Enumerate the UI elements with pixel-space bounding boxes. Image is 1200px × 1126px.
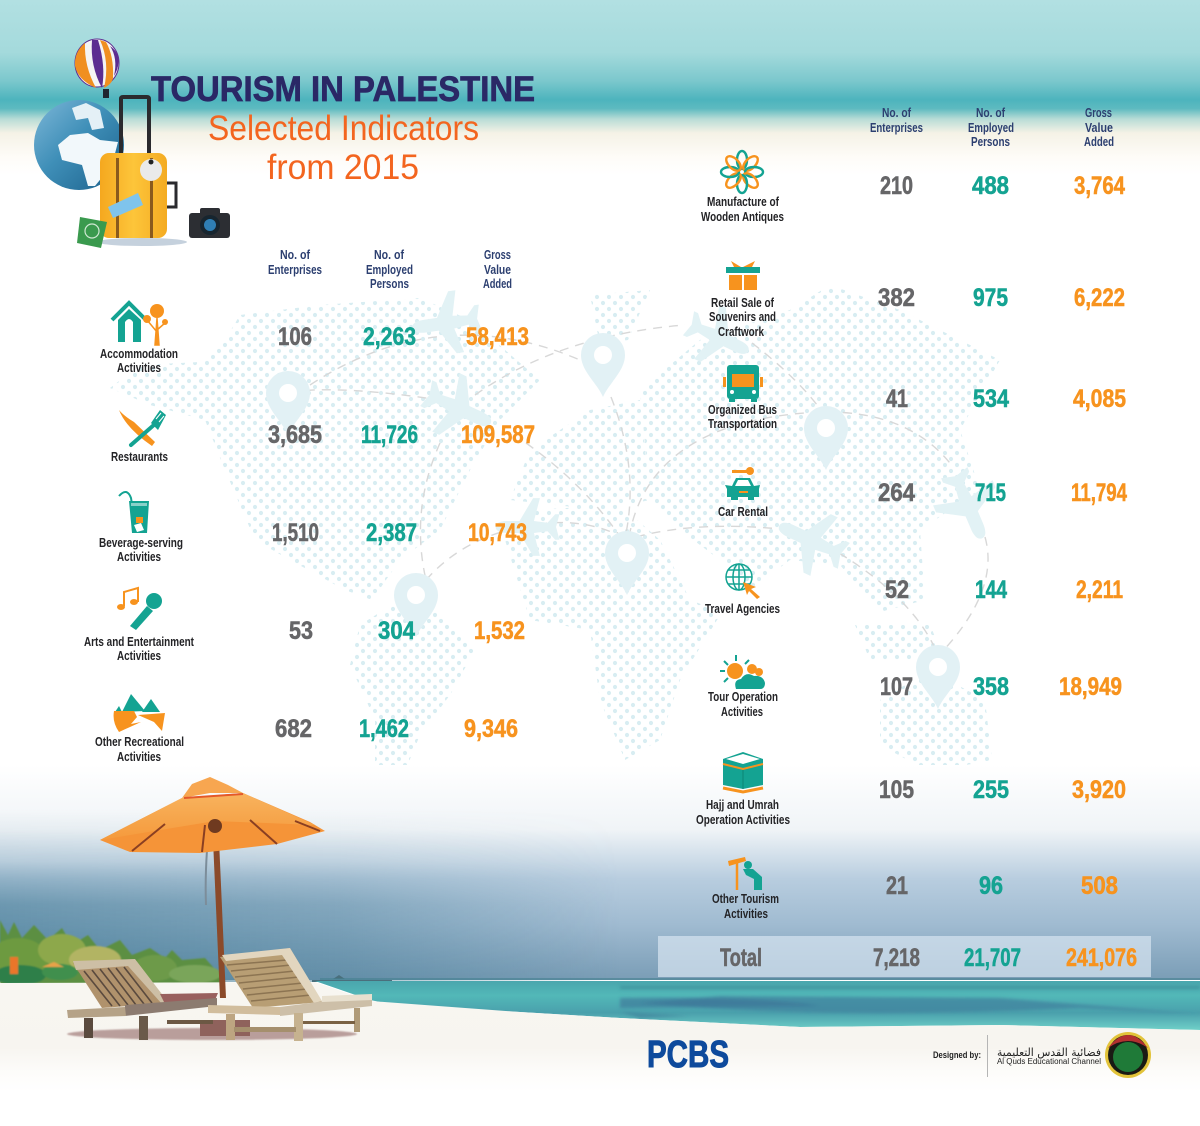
label	[99, 536, 183, 564]
values: 21	[886, 872, 908, 900]
label	[701, 195, 784, 224]
total row: Total	[720, 944, 762, 972]
title: TOURISM IN PALESTINE	[151, 70, 535, 109]
umbrella	[100, 777, 325, 1036]
pier	[312, 975, 392, 982]
values: 9,346	[464, 715, 518, 743]
sand	[0, 982, 1200, 1092]
column headers: Gross	[1085, 106, 1112, 120]
values: 488	[972, 172, 1009, 200]
row: souvenirs	[709, 261, 1125, 339]
row: bus	[708, 365, 1126, 431]
credit: designed by	[933, 1035, 1101, 1077]
label: Transportation	[708, 417, 777, 431]
icon: person at telescope	[728, 857, 762, 890]
values	[268, 421, 535, 449]
label	[709, 296, 776, 339]
icon: bus	[723, 365, 763, 402]
label: Organized Bus	[708, 403, 777, 417]
icon: mountains and river	[114, 694, 165, 732]
icon: geometric flower	[721, 151, 763, 193]
label: Operation Activities	[696, 813, 790, 827]
values: 6,222	[1074, 284, 1125, 312]
sea	[315, 978, 1200, 1030]
left sun lounger	[67, 959, 218, 1040]
icon: hot air balloon	[75, 39, 119, 98]
icon: car and key	[725, 467, 760, 500]
values: 682	[275, 715, 312, 743]
column headers: Persons	[971, 135, 1010, 149]
right sun lounger	[208, 948, 372, 1041]
illustration: travel cluster	[34, 39, 230, 248]
column headers: No. of	[280, 248, 311, 262]
values: 975	[973, 284, 1008, 312]
values	[880, 673, 1122, 701]
values: 58,413	[466, 323, 529, 351]
column headers: Added	[483, 277, 512, 291]
label: Tour Operation	[708, 690, 778, 704]
values: 715	[975, 479, 1006, 507]
values: 255	[973, 776, 1009, 804]
column headers: Enterprises	[268, 263, 322, 277]
values: 41	[886, 385, 908, 413]
values: 3,685	[268, 421, 322, 449]
label	[708, 403, 777, 431]
values: 3,920	[1072, 776, 1126, 804]
label: Accommodation	[100, 347, 178, 361]
label	[712, 892, 779, 921]
values: 3,764	[1074, 172, 1125, 200]
row: arts and entertainment	[84, 588, 525, 663]
values	[880, 172, 1125, 200]
label	[696, 798, 790, 827]
icon: globe	[34, 100, 124, 190]
label: Activities	[117, 550, 161, 564]
shadow under chairs	[67, 1028, 357, 1040]
label: Arts and Entertainment	[84, 635, 195, 649]
icon: camera	[189, 208, 230, 238]
values	[885, 576, 1123, 604]
label	[100, 347, 178, 375]
values: 534	[973, 385, 1009, 413]
icon: passport	[77, 217, 107, 248]
values: 210	[880, 172, 913, 200]
icon: kaaba	[723, 752, 763, 792]
label: Activities	[117, 750, 161, 764]
values: 105	[879, 776, 914, 804]
icon: sun and cloud	[720, 655, 765, 689]
values: 106	[278, 323, 312, 351]
column headers	[870, 106, 1114, 149]
subtitle: Selected Indicators	[208, 109, 479, 148]
values: 144	[975, 576, 1007, 604]
values: 382	[878, 284, 915, 312]
column headers: No. of	[976, 106, 1006, 120]
column headers: Enterprises	[870, 121, 923, 135]
values	[879, 776, 1126, 804]
row: wooden antiques	[701, 151, 1125, 224]
label: Souvenirs and	[709, 310, 776, 324]
values	[289, 617, 525, 645]
row: restaurants	[111, 410, 535, 464]
values: 2,387	[366, 519, 417, 547]
values: 2,211	[1076, 576, 1123, 604]
sky	[0, 765, 1200, 980]
icon: suitcase	[97, 97, 187, 246]
icon: gift box	[726, 261, 760, 290]
background: dashed flight routes	[290, 325, 988, 653]
label: Travel Agencies	[705, 602, 780, 616]
row: car rental	[718, 467, 1127, 519]
label	[95, 735, 184, 764]
values: 18,949	[1059, 673, 1122, 701]
background: dotted world map	[110, 285, 1000, 805]
values: 1,532	[474, 617, 525, 645]
total row	[658, 936, 1151, 977]
logo: channel emblem	[1105, 1032, 1151, 1078]
background: airplanes	[408, 287, 1012, 585]
values	[886, 385, 1126, 413]
column headers	[268, 248, 512, 291]
values	[275, 715, 518, 743]
panel: right indicators table	[658, 106, 1151, 977]
column headers: No. of	[882, 106, 912, 120]
credit: designed by: فضائية القدس التعليمية	[997, 1046, 1101, 1059]
values: 304	[378, 617, 415, 645]
values	[278, 323, 529, 351]
values: 107	[880, 673, 913, 701]
column headers: Employed	[968, 121, 1014, 135]
label: Other Tourism	[712, 892, 779, 906]
label	[84, 635, 195, 663]
label: Other Recreational	[95, 735, 184, 749]
row: other recreational	[95, 694, 518, 764]
values: 109,587	[461, 421, 535, 449]
values	[878, 284, 1125, 312]
column headers: Value	[1085, 121, 1113, 135]
label: Hajj and Umrah	[706, 798, 779, 812]
values: 52	[885, 576, 909, 604]
label: Activities	[117, 361, 161, 375]
panel: left indicators table	[84, 248, 535, 764]
icon: house and tree	[112, 303, 168, 345]
row: beverage-serving	[99, 492, 527, 564]
total row: 241,076	[1066, 944, 1137, 972]
subtitle	[208, 109, 479, 187]
icon: microphone and notes	[117, 588, 162, 630]
column headers: No. of	[374, 248, 405, 262]
column headers: Persons	[370, 277, 409, 291]
values: 264	[878, 479, 915, 507]
row: other tourism	[712, 857, 1118, 921]
values: 10,743	[468, 519, 527, 547]
icon: knife and fork	[119, 410, 166, 446]
values: 53	[289, 617, 313, 645]
label: Car Rental	[718, 505, 768, 519]
row: accommodation	[100, 303, 529, 375]
label: Restaurants	[111, 450, 168, 464]
trees	[0, 920, 225, 985]
values: 1,462	[359, 715, 409, 743]
label: Craftwork	[718, 325, 764, 339]
values: 358	[973, 673, 1009, 701]
values: 4,085	[1073, 385, 1126, 413]
label	[708, 690, 778, 719]
label: Manufacture of	[707, 195, 780, 209]
label: Activities	[117, 649, 161, 663]
label: Retail Sale of	[711, 296, 775, 310]
total row: 7,218	[873, 944, 920, 972]
label: Activities	[724, 907, 768, 921]
values: 11,726	[361, 421, 418, 449]
beach photo	[0, 765, 1200, 1064]
row: hajj and umrah	[696, 752, 1126, 827]
column headers: Gross	[484, 248, 511, 262]
credit: designed by: Designed by:	[933, 1050, 981, 1060]
background: map pins	[266, 333, 960, 709]
left sky shading	[0, 826, 595, 982]
label: Beverage-serving	[99, 536, 183, 550]
column headers: Value	[484, 263, 511, 277]
logo: PCBS: PCBS	[647, 1034, 729, 1076]
row: travel agencies	[705, 564, 1123, 616]
icon: drink glass	[119, 492, 149, 533]
values: 11,794	[1071, 479, 1127, 507]
subtitle: from 2015	[267, 148, 419, 187]
values: 508	[1081, 872, 1118, 900]
values	[878, 479, 1127, 507]
values: 1,510	[272, 519, 319, 547]
column headers: Added	[1084, 135, 1114, 149]
label: Wooden Antiques	[701, 210, 784, 224]
label: Activities	[721, 705, 763, 719]
total row: 21,707	[964, 944, 1021, 972]
values	[886, 872, 1118, 900]
icon: web globe and cursor	[726, 564, 760, 599]
values: 2,263	[363, 323, 416, 351]
credit: designed by: Al Quds Educational Channel	[997, 1057, 1101, 1066]
row: tour operation	[708, 655, 1122, 719]
values	[272, 519, 527, 547]
values: 96	[979, 872, 1003, 900]
column headers: Employed	[366, 263, 413, 277]
